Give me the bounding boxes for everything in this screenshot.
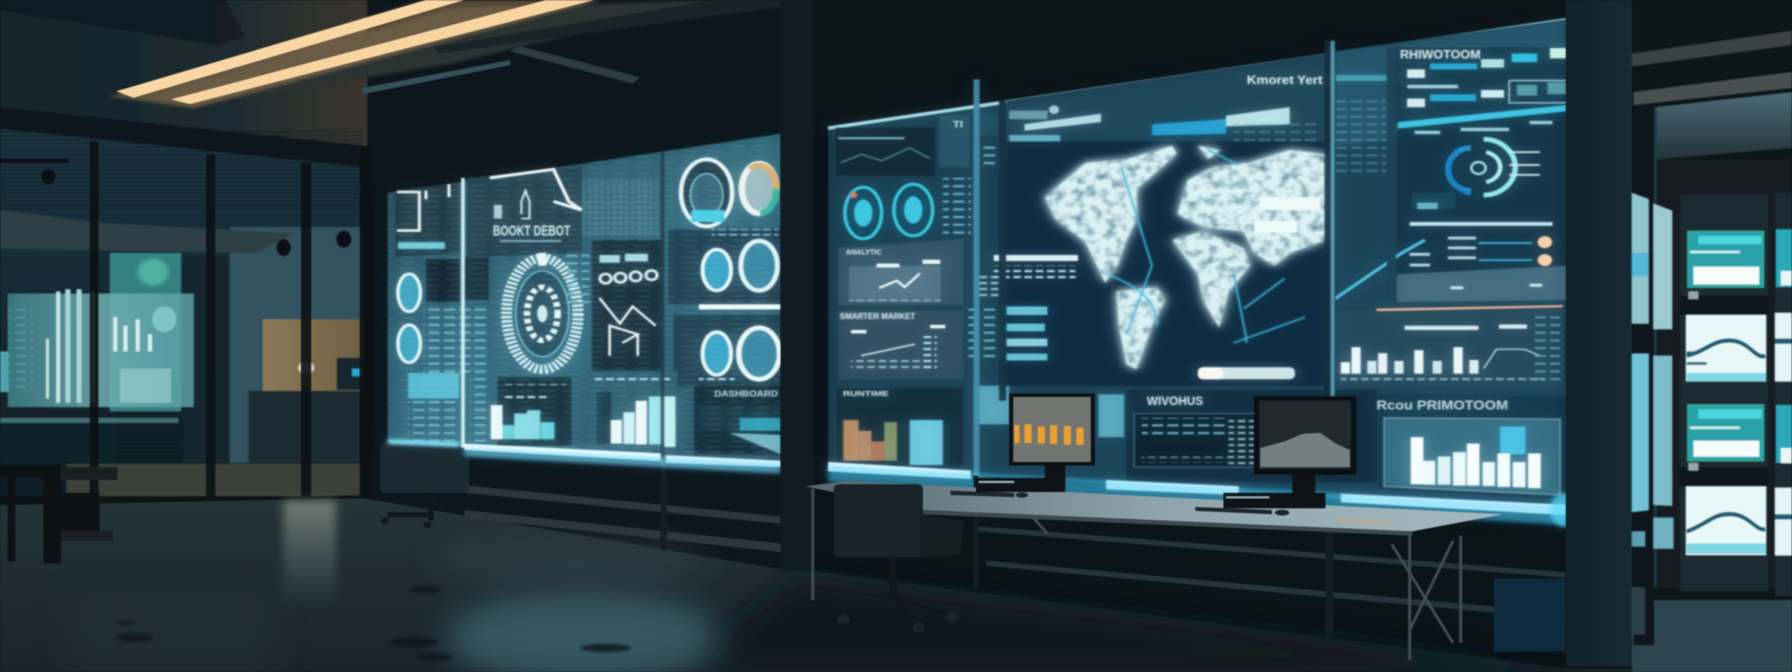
- chart: bottom right bar chart: Rcou PRIMOTOOM: [1376, 399, 1508, 413]
- line chart: lower right: [694, 386, 781, 454]
- panel: map header bars: [1007, 54, 1325, 171]
- chart: white bars strip: [1333, 304, 1563, 388]
- chart: bottom right bar chart: [1376, 394, 1567, 499]
- rack screen: second: [1686, 315, 1766, 381]
- panel: top right status rows: RHIWOTOOM: [1400, 48, 1481, 61]
- rack screen: top: [1688, 231, 1764, 287]
- rack screen: third: [1688, 405, 1764, 461]
- icon: ring dials: [668, 229, 781, 386]
- panel: right wall screen with world map: [828, 18, 1581, 527]
- glass wall posts: [0, 141, 372, 514]
- heading: left screen title: [467, 166, 658, 257]
- icon: top right gauges: [681, 159, 776, 226]
- icon: teal ring gauges: [845, 184, 933, 239]
- chart: heatmap bars: RUNTIME: [843, 389, 889, 398]
- left glass-walled room and ceiling: [0, 0, 800, 570]
- line chart: lower right: DASHBOARD: [714, 388, 778, 398]
- chair by left screen: [380, 444, 469, 528]
- chart: step area panel: [838, 311, 963, 379]
- panel: wins table: WIVOHUS: [1147, 394, 1203, 408]
- bar chart: centre bottom: [491, 377, 571, 446]
- monitor: area chart: [1223, 396, 1356, 508]
- divider posts: [973, 41, 1396, 478]
- monitor: orange bars: [976, 393, 1095, 492]
- large column: [1566, 0, 1632, 666]
- wall rails under left screen: [464, 463, 781, 552]
- chart: world map: [994, 141, 1325, 386]
- chart: heatmap bars: [837, 388, 963, 467]
- bottom edge glow: [828, 462, 1581, 527]
- chart: circular gear dial: [507, 253, 578, 369]
- desk with monitors and keyboards: [805, 393, 1503, 660]
- chart: rising line panel: ANALYTIC: [846, 248, 882, 256]
- ceiling light fixtures: [110, 0, 800, 108]
- column between screens: [781, 0, 814, 571]
- panel section: top left dark cell: [395, 182, 490, 441]
- rack screen: fourth: [1686, 486, 1766, 555]
- panel: narrow middle strip: TI: [953, 120, 963, 130]
- hologram projection behind glass: [0, 253, 194, 423]
- panel: left column charts: [836, 128, 971, 467]
- panel: narrow middle strip: [939, 114, 1009, 424]
- left foreground table and bench: [0, 465, 117, 564]
- panel: circles and line chart: [566, 240, 661, 371]
- panel: signal dial and progress rows: [1333, 111, 1567, 302]
- chart: rising line panel: [838, 239, 963, 305]
- desk legs: [813, 489, 1461, 660]
- panel: left wall screen: [388, 134, 781, 474]
- floor: [0, 498, 1792, 672]
- heading: map title: Kmoret Yert: [1247, 73, 1323, 87]
- chart: step area panel: SMARTER MARKET: [840, 311, 916, 321]
- keyboards: [951, 491, 1399, 524]
- panel: top right status rows: [1333, 19, 1567, 176]
- under desk rails: [973, 476, 1565, 651]
- icon: left gauges: [398, 274, 420, 363]
- heading: left screen title: BOOKT DEBOT: [493, 224, 571, 239]
- icon: concentric arcs: [1448, 139, 1540, 195]
- glass side panels: [1632, 193, 1673, 634]
- bar chart: ascending bars: [586, 371, 678, 450]
- panel: wins table: [1098, 390, 1376, 482]
- office chair at desk: [834, 484, 963, 632]
- right server room through doorway: [1632, 0, 1792, 645]
- rack screens: far column: [1775, 229, 1792, 555]
- divider post: [461, 178, 465, 448]
- bottom edge glow: [388, 439, 781, 474]
- rack cabinets: [1680, 193, 1792, 596]
- screen texture overlay: [388, 134, 781, 467]
